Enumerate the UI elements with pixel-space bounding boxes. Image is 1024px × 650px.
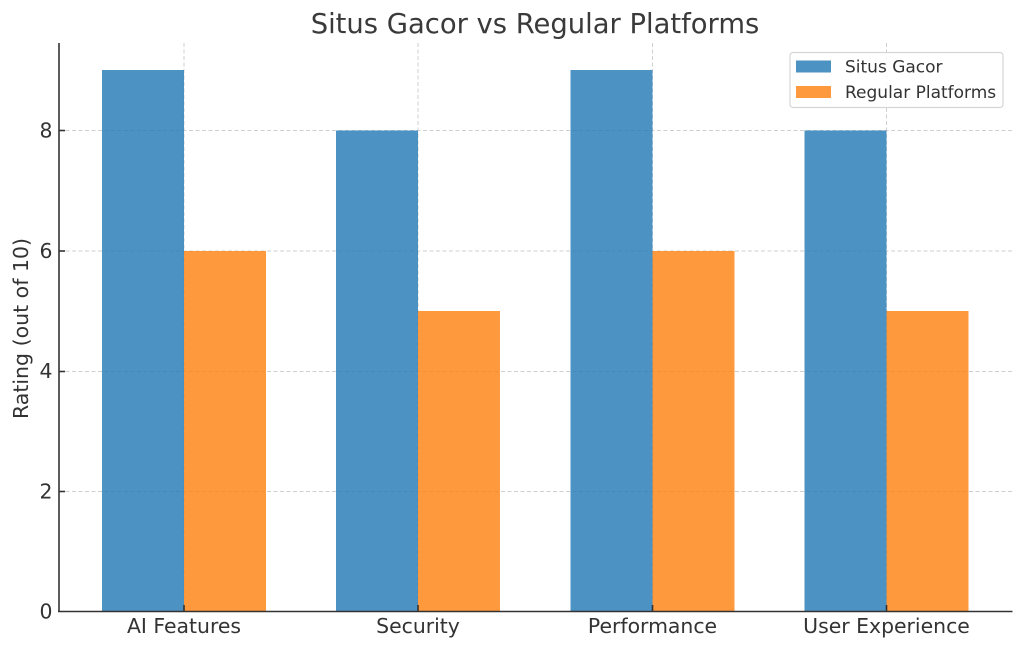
legend item: Situs Gacor (796, 58, 943, 78)
bar chart (102, 70, 968, 611)
title: Situs Gacor vs Regular Platforms (311, 9, 759, 40)
legend (790, 52, 1003, 108)
y axis label: Rating (out of 10) (9, 238, 33, 419)
x axis category labels: Performance (588, 614, 717, 638)
series: Regular Platforms bars (184, 251, 968, 611)
y axis tick labels: 6 (40, 239, 52, 263)
x axis category labels: User Experience (803, 614, 970, 638)
y axis tick labels: 4 (40, 359, 52, 383)
y axis tick labels: 8 (40, 118, 52, 142)
y axis tick labels (40, 118, 52, 624)
x axis category labels (127, 614, 970, 638)
y axis tick labels: 2 (40, 480, 52, 504)
y axis tick labels: 0 (40, 600, 52, 624)
x axis category labels: AI Features (127, 614, 241, 638)
legend item: Regular Platforms: Regular Platforms (845, 83, 996, 103)
legend item: Situs Gacor: Situs Gacor (845, 58, 943, 78)
series: Situs Gacor bars (102, 70, 886, 611)
x axis category labels: Security (376, 614, 460, 638)
